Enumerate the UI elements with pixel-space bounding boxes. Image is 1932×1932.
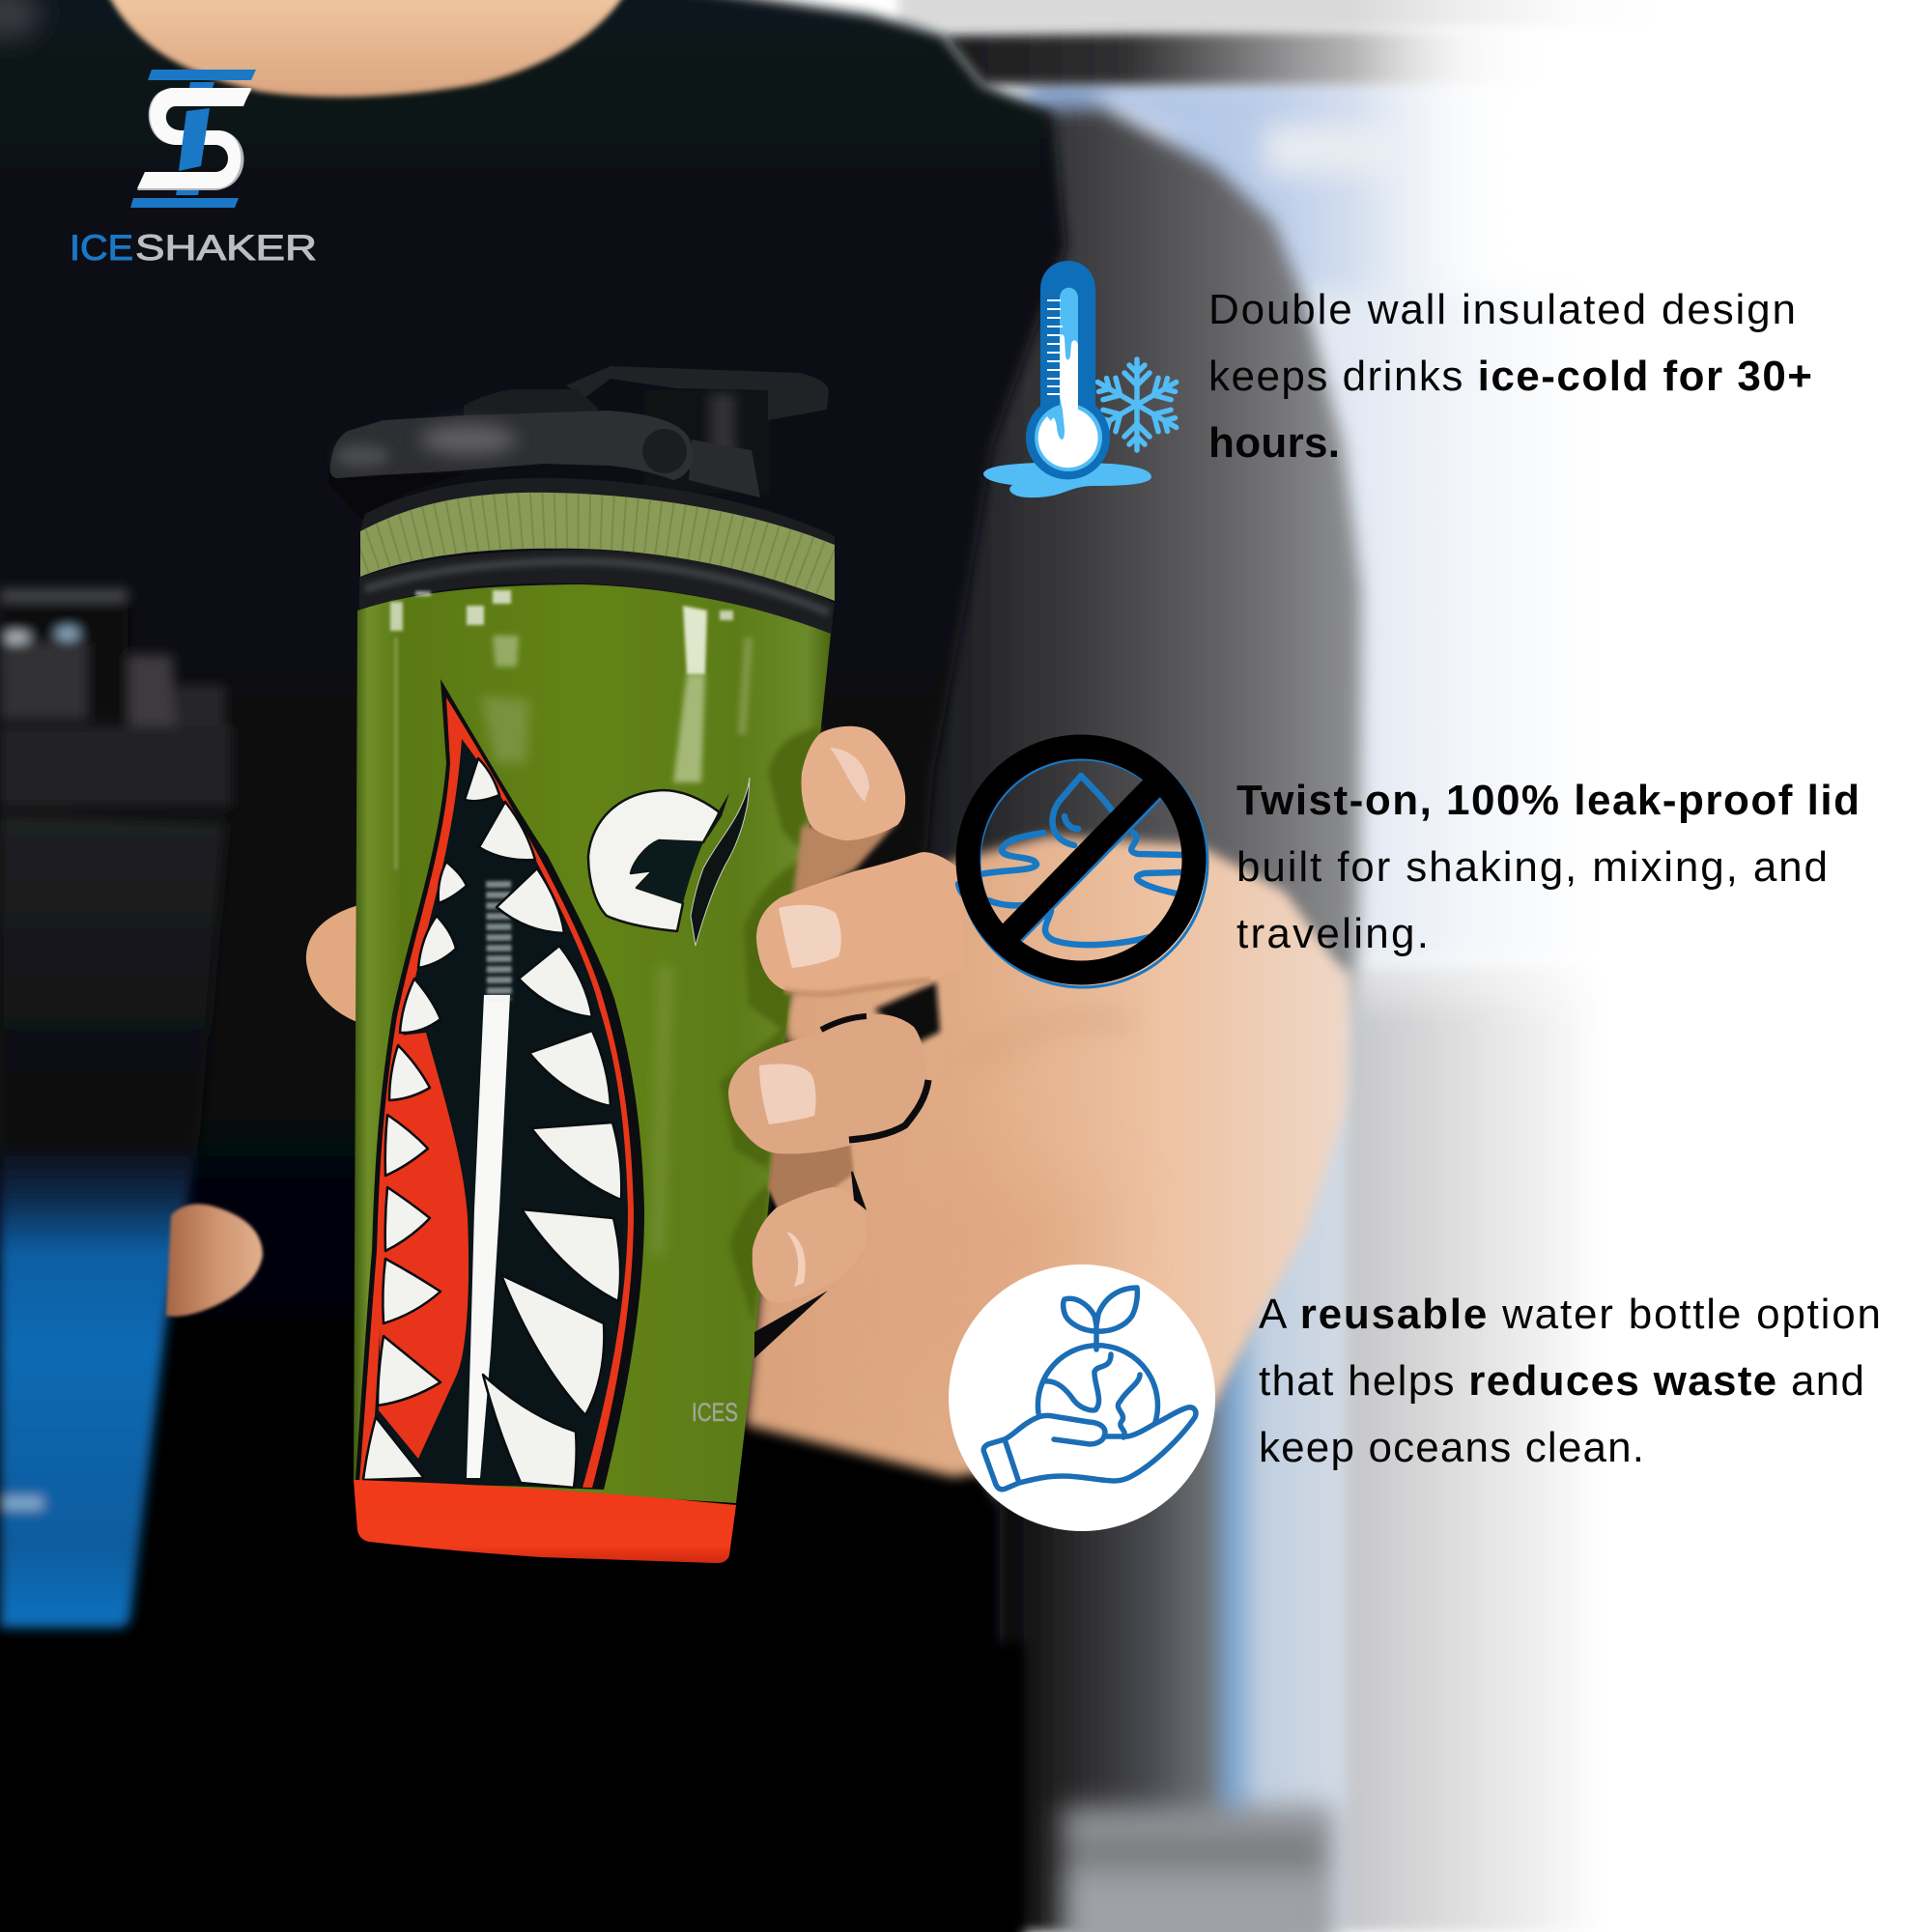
black ring <box>359 550 835 636</box>
red silicone base <box>354 1480 736 1563</box>
text: reusable bottle: A reusable water bottle option <box>1259 1291 1881 1338</box>
ring marks <box>852 1172 865 1208</box>
lower teeth <box>363 862 467 1480</box>
centre highlight stripe <box>467 995 510 1478</box>
icon: no leaks prohibition sign <box>958 738 1208 987</box>
text: double wall insulation: hours. <box>1208 419 1340 467</box>
logo mark <box>130 70 256 208</box>
text: reusable bottle: keep oceans clean. <box>1259 1424 1644 1471</box>
snowflake <box>1092 359 1182 450</box>
bottle body <box>354 584 831 1503</box>
text: leak-proof lid: Twist-on, 100% leak-proof lid <box>1236 777 1860 824</box>
neck skin <box>101 0 633 97</box>
upper teeth <box>465 758 621 1488</box>
bottle eye logo <box>588 778 750 1427</box>
text: leak-proof lid: built for shaking, mixing, and <box>1236 843 1828 891</box>
lid rim <box>360 478 835 547</box>
logo: Iceshaker <box>70 70 317 268</box>
lower right blurred background <box>0 966 1932 1932</box>
main shaker bottle <box>328 366 835 1563</box>
small bottle wordmark: ICES <box>692 1398 738 1427</box>
thumb behind main bottle <box>306 904 362 1024</box>
finger 3 <box>728 1014 928 1154</box>
finger 1 <box>801 726 905 840</box>
tapered body <box>0 814 225 1628</box>
shark mouth <box>355 679 644 1490</box>
text: leak-proof lid <box>1236 777 1860 957</box>
twist lid loop <box>330 411 694 480</box>
body highlights <box>390 590 749 1256</box>
logo wordmark <box>70 228 317 268</box>
ring <box>849 1080 928 1140</box>
globe <box>1037 1346 1157 1422</box>
text: double wall insulation: Double wall insulated design <box>1208 286 1796 333</box>
finger 4 <box>753 1172 867 1358</box>
thermometer <box>1026 261 1110 479</box>
logo wordmark: SHAKER <box>135 228 317 268</box>
collar ribs <box>361 519 835 572</box>
hand <box>983 1407 1196 1490</box>
white fade over background <box>1333 0 1932 1932</box>
thin blue outlines <box>958 738 1208 987</box>
logo wordmark: ICE <box>70 228 133 268</box>
finger 2 <box>756 852 966 994</box>
icon: hand holding globe with sprout <box>949 1264 1215 1531</box>
small black bottle at left <box>0 589 232 1628</box>
green finger reflections <box>720 726 821 1323</box>
puddle <box>983 462 1151 497</box>
collar <box>0 725 232 807</box>
red lower lip <box>379 1033 469 1459</box>
text: double wall insulation <box>1208 286 1812 467</box>
skin web between fingers <box>792 821 898 903</box>
text: reusable bottle <box>1259 1291 1881 1471</box>
second hand <box>166 1204 263 1317</box>
forearm and hand <box>746 836 1350 1477</box>
black gap between fingers <box>874 982 940 1042</box>
fingers <box>728 726 966 1358</box>
text: reusable bottle: that helps reduces waste and <box>1259 1357 1864 1405</box>
sprout <box>1094 1327 1099 1350</box>
water lines and drop <box>958 776 1181 945</box>
back flip cap <box>464 366 829 497</box>
text: leak-proof lid: traveling. <box>1236 910 1429 957</box>
olive collar <box>360 493 835 601</box>
icon: melting thermometer with snowflake <box>983 261 1182 497</box>
neck and spout <box>0 589 225 737</box>
lid underside <box>328 473 464 519</box>
text: double wall insulation: keeps drinks ice-cold for 30+ <box>1208 353 1812 400</box>
black ring and slash <box>968 747 1194 973</box>
black shirt <box>0 0 1362 1932</box>
